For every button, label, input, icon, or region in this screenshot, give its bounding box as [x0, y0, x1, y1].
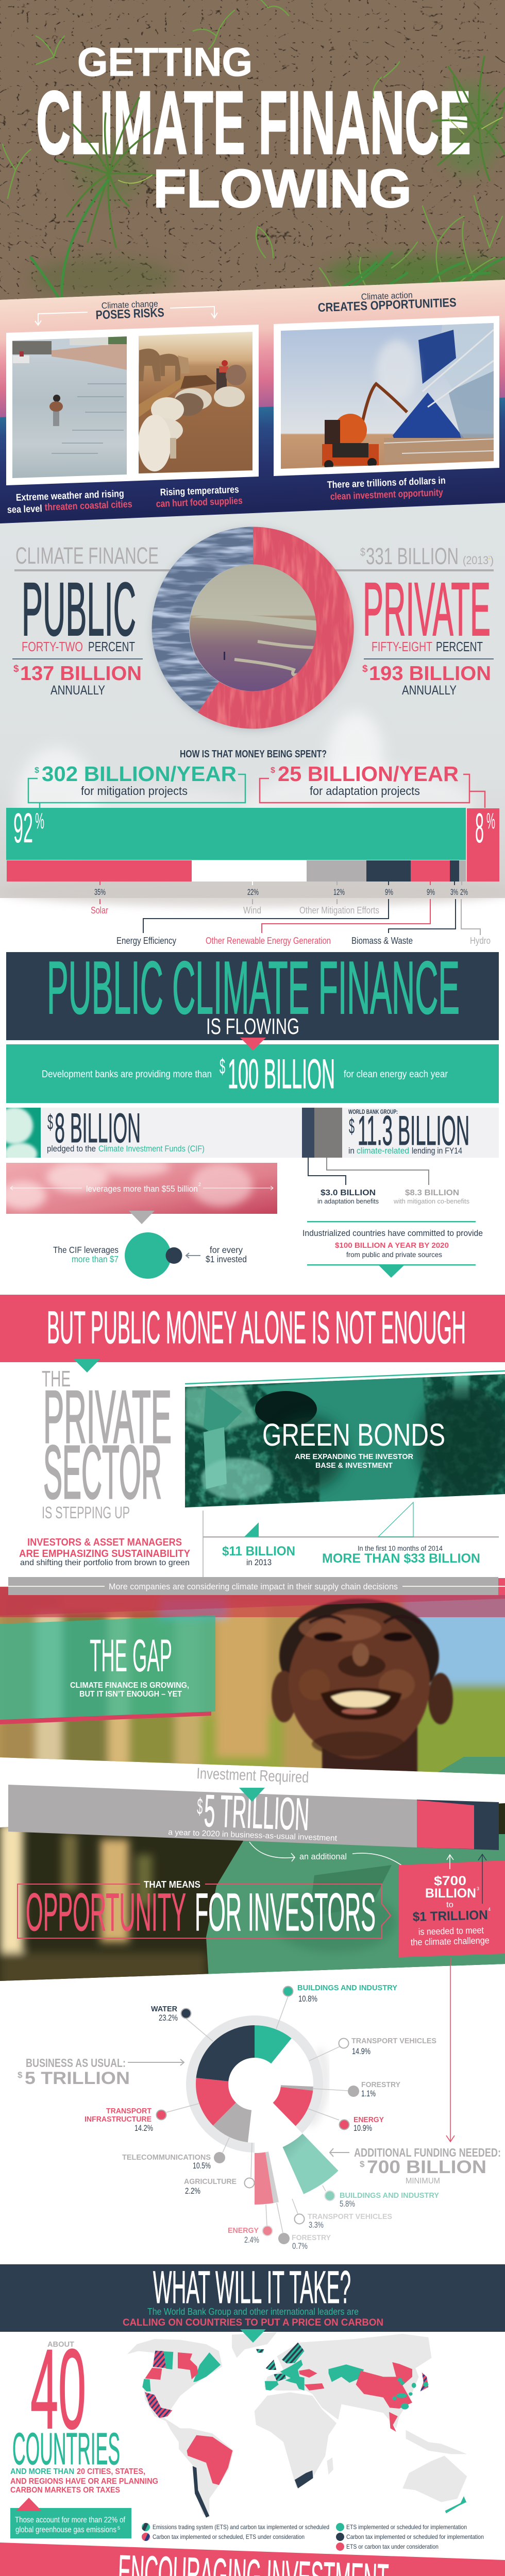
donut: public vs private share — [152, 527, 354, 731]
lending breakdown: with mitigation co-benefits — [393, 1198, 469, 1205]
private panel: ANNUALLY — [402, 683, 457, 698]
lending breakdown — [308, 1158, 469, 1205]
additional text with curved arrows: an additional — [299, 1852, 347, 1861]
photo: lower part with green shirt — [0, 1798, 505, 1989]
cif leverage graphic: $1 invested — [206, 1254, 247, 1264]
caption: trillions of dollars: There are trillions of dollars in — [327, 476, 446, 490]
public panel: ANNUALLY — [50, 683, 105, 698]
label: additional energy: 2.4% — [244, 2235, 259, 2245]
panel: 700 billion to 1 trillion: is needed to meet — [418, 1925, 484, 1937]
label: forestry: FORESTRY — [361, 2081, 400, 2089]
pink band heading — [0, 1295, 505, 1362]
panel: the gap: CLIMATE FINANCE IS GROWING, — [70, 1681, 189, 1690]
adaptation callout: $ — [271, 766, 275, 775]
label: additional buildings and industry: BUILDINGS AND INDUSTRY — [340, 2192, 439, 2200]
label: additional buildings and industry: 5.8% — [340, 2199, 355, 2209]
panel: the gap: BUT IT ISN’T ENOUGH – YET — [79, 1690, 182, 1699]
investors text: ARE EMPHASIZING SUSTAINABILITY — [19, 1548, 191, 1560]
leader lines — [100, 882, 480, 935]
label: transport infrastructure: TRANSPORT — [106, 2107, 152, 2115]
panel: 700 billion to 1 trillion — [399, 1854, 505, 1957]
panel: 8 billion pledged: $ — [47, 1110, 53, 1134]
cif leverage graphic: more than $7 — [72, 1254, 119, 1264]
text: PUBLIC — [22, 567, 136, 652]
arrow triangle grey — [129, 1211, 155, 1224]
arrow: to left photo — [35, 312, 88, 325]
label: additional funding needed — [330, 2146, 501, 2185]
label: energy: ENERGY — [354, 2116, 384, 2124]
label: additional transport vehicles: TRANSPORT VEHICLES — [308, 2213, 392, 2221]
five trillion text: a year to 2020 in business-as-usual investment — [168, 1828, 338, 1843]
panel: 700 billion to 1 trillion: BILLION — [425, 1886, 476, 1901]
panel: world bank group lending: climate-related — [357, 1146, 409, 1156]
about 40 countries stat: CARBON MARKETS OR TAXES — [10, 2486, 120, 2495]
panel: 700 billion to 1 trillion: 4 — [488, 1907, 491, 1912]
heading: climate finance total: $ — [360, 546, 365, 558]
map legend: Carbon tax implemented or scheduled for implementation — [346, 2533, 484, 2540]
photo: cattle and camels — [138, 332, 252, 474]
label: business as usual — [18, 2056, 184, 2088]
panel: development banks: $ — [220, 1054, 225, 1078]
title — [36, 39, 471, 219]
private panel: PERCENT — [436, 639, 483, 654]
panel: world bank group lending: lending in FY14 — [412, 1146, 462, 1156]
investment bars — [8, 1785, 499, 1850]
arrow triangle teal over bar — [239, 1788, 265, 1802]
panel: the gap: THE GAP — [90, 1630, 172, 1681]
panel: world bank group lending: WORLD BANK GROUP: — [348, 1109, 398, 1115]
cif leverage graphic: The CIF leverages — [53, 1245, 119, 1255]
green bonds photo panel: BASE & INVESTMENT — [315, 1461, 393, 1470]
about 40 countries stat: COUNTRIES — [12, 2424, 120, 2474]
label: additional forestry: FORESTRY — [292, 2234, 331, 2242]
text: SECTOR — [43, 1430, 162, 1515]
industrialized countries commitment: from public and private sources — [346, 1250, 442, 1259]
adaptation callout — [260, 762, 485, 808]
right photo frame — [274, 316, 499, 476]
text: PRIVATE — [43, 1375, 172, 1459]
caption: trillions of dollars — [327, 476, 446, 502]
about 40 countries stat: 20 CITIES, STATES, — [77, 2467, 145, 2476]
private panel: 193 BILLION — [369, 663, 491, 685]
bar chart: spending split: 8 — [475, 805, 484, 852]
heading: the private sector — [42, 1366, 172, 1522]
panel: world bank group lending: in — [348, 1146, 355, 1156]
caption: rising temperatures: can hurt food supplies — [156, 496, 243, 510]
green bonds chart: $11 BILLION — [222, 1544, 295, 1558]
arrow triangle teal — [74, 1359, 100, 1372]
label: transport infrastructure: INFRASTRUCTURE — [85, 2115, 152, 2124]
label: telecommunications: 10.5% — [193, 2161, 211, 2171]
industrialized countries commitment: Industrialized countries have committed to provide — [302, 1228, 483, 1238]
mitigation callout: $ — [35, 766, 39, 775]
bar chart: spending split: % — [35, 808, 44, 834]
ets and tax hatched regions — [256, 2343, 305, 2382]
cif leverage graphic — [53, 1232, 247, 1279]
private panel: FIFTY-EIGHT — [372, 639, 432, 654]
label: telecommunications — [122, 2152, 225, 2171]
green bonds chart: in 2013 — [246, 1557, 272, 1567]
caption: extreme weather: Extreme weather and rising — [15, 488, 124, 503]
category labels: Other Renewable Energy Generation — [206, 936, 331, 946]
adaptation callout: 25 BILLION/YEAR — [278, 762, 459, 786]
panel: leverages 55 billion — [6, 1163, 277, 1214]
donut leader lines — [166, 1996, 348, 2233]
panel: opportunity for investors: OPPORTUNITY — [26, 1883, 186, 1942]
label: business as usual: $ — [18, 2070, 23, 2080]
panel: 700 billion to 1 trillion: to — [446, 1901, 453, 1909]
percentage values: 35% — [94, 887, 106, 897]
about 40 countries stat: AND MORE THAN — [10, 2467, 74, 2476]
panel: 8 billion pledged: Climate Investment Funds (CIF) — [98, 1144, 205, 1154]
mitigation callout: 302 BILLION/YEAR — [42, 762, 237, 786]
percentage values: 9% — [427, 887, 435, 897]
heading: climate finance total: 331 BILLION — [366, 543, 459, 569]
map legend: ETS or carbon tax under consideration — [346, 2543, 439, 2550]
public panel — [12, 567, 143, 698]
left photo frame — [6, 325, 259, 485]
green bonds photo panel: ARE EXPANDING THE INVESTOR — [295, 1452, 413, 1461]
public panel: FORTY-TWO — [22, 639, 83, 654]
about 40 countries stat: ABOUT — [47, 2341, 74, 2349]
panel: development banks: Development banks are providing more than — [42, 1069, 212, 1080]
five trillion text: $ — [197, 1794, 203, 1819]
label: energy — [339, 2116, 384, 2133]
percentage values: 22% — [247, 887, 259, 897]
panel: 700 billion to 1 trillion: the climate challenge — [411, 1935, 490, 1947]
dark band: what will it take — [0, 2261, 505, 2332]
mitigation callout — [28, 762, 245, 808]
panel: 8 billion pledged: pledged to the — [47, 1144, 96, 1154]
dark band: what will it take: The World Bank Group and other international leaders are — [147, 2307, 359, 2317]
callout: share of emissions: global greenhouse gas emissions — [15, 2526, 116, 2534]
investors text: INVESTORS & ASSET MANAGERS — [27, 1537, 182, 1548]
adaptation callout: for adaptation projects — [310, 784, 420, 798]
under consideration regions — [145, 2352, 412, 2485]
percentage values: 9% — [385, 887, 393, 897]
lending breakdown: $8.3 BILLION — [405, 1189, 459, 1197]
panel: world bank group lending — [302, 1108, 499, 1158]
photo: hazy beach in ring — [190, 564, 319, 691]
label: business as usual: 5 TRILLION — [25, 2069, 130, 2088]
panel: 700 billion to 1 trillion: 3 — [477, 1886, 479, 1891]
panel: the gap — [0, 1615, 215, 1724]
donut chart: investment by sector — [186, 2015, 339, 2205]
header photo: cracked earth — [0, 0, 505, 304]
label: forestry — [348, 2081, 400, 2098]
heading: climate change poses risks — [95, 299, 164, 323]
private panel — [362, 567, 494, 698]
about 40 countries stat — [10, 2326, 158, 2495]
public panel: $ — [13, 664, 19, 674]
category labels: Wind — [243, 905, 261, 916]
heading: climate change poses risks: Climate change — [101, 299, 158, 311]
panel: development banks: for clean energy each year — [344, 1069, 448, 1080]
panel: 700 billion to 1 trillion: $1 TRILLION — [412, 1908, 488, 1924]
caption: trillions of dollars: clean investment opportunity — [330, 487, 443, 502]
arrow: to right photo — [170, 307, 217, 318]
label: additional funding needed: $ — [360, 2159, 365, 2169]
label: agriculture: 2.2% — [185, 2186, 200, 2196]
gradient band: risks and opportunities — [0, 280, 505, 523]
green bonds chart: In the first 10 months of 2014 — [358, 1544, 443, 1552]
panel: development banks — [6, 1044, 499, 1103]
about 40 countries stat: 40 — [30, 2326, 86, 2452]
panel: opportunity for investors: THAT MEANS — [144, 1879, 200, 1890]
percentage values: 2% — [460, 887, 468, 897]
label: additional transport vehicles — [295, 2213, 392, 2230]
label: energy: 10.9% — [354, 2123, 372, 2133]
dark band: what will it take: CALLING ON COUNTRIES TO PUT A PRICE ON CARBON — [123, 2317, 383, 2328]
panel: public climate finance heading: IS FLOWING — [206, 1014, 299, 1039]
investors text — [19, 1537, 191, 1567]
map legend: Emissions trading system (ETS) and carbon tax implemented or scheduled — [153, 2523, 329, 2531]
public panel: 137 BILLION — [20, 663, 142, 685]
heading: climate finance total: CLIMATE FINANCE — [15, 543, 159, 569]
category labels: Other Mitigation Efforts — [299, 905, 379, 916]
label: agriculture: AGRICULTURE — [184, 2178, 237, 2186]
label: additional transport vehicles: 3.3% — [309, 2220, 324, 2230]
percentage values: 12% — [333, 887, 345, 897]
bar chart: spending split — [6, 805, 499, 882]
public panel: PERCENT — [88, 639, 135, 654]
category labels: Biomass & Waste — [351, 936, 413, 946]
cif leverage graphic: for every — [210, 1245, 243, 1255]
panel: development banks: 100 BILLION — [228, 1051, 335, 1097]
grey strip: supply chain: More companies are considering climate impact in their supply chain decisions — [109, 1582, 398, 1591]
arrow triangle into map — [240, 2329, 266, 2343]
green bonds photo panel — [185, 1370, 505, 1510]
industrialized countries commitment: $100 BILLION A YEAR BY 2020 — [335, 1241, 449, 1250]
world map of carbon pricing — [127, 2332, 467, 2518]
panel: leverages 55 billion: 2 — [198, 1182, 201, 1187]
five trillion text — [168, 1785, 338, 1843]
label: additional forestry — [278, 2233, 331, 2251]
label: agriculture — [184, 2178, 255, 2196]
heading: climate finance total: 1 — [488, 555, 491, 560]
heading: climate action creates opportunities: Climate action — [361, 290, 413, 302]
grey strip: supply chain — [0, 1577, 505, 1595]
label: telecommunications: TELECOMMUNICATIONS — [122, 2154, 211, 2162]
hatched regions of the map — [145, 2351, 428, 2418]
caption: extreme weather: sea level — [7, 503, 42, 516]
ets cities in china and japan — [392, 2378, 428, 2410]
lending breakdown: in adaptation benefits — [317, 1198, 379, 1205]
five trillion text: 5 TRILLION — [203, 1785, 310, 1840]
panel: world bank group lending: $ — [349, 1114, 355, 1138]
panel: leverages 55 billion: leverages more than $55 billion — [86, 1184, 198, 1194]
heading: climate finance total — [14, 543, 494, 571]
heading: climate change poses risks: POSES RISKS — [95, 306, 164, 323]
label: transport infrastructure — [85, 2107, 166, 2133]
caption: rising temperatures — [156, 484, 243, 510]
question heading: HOW IS THAT MONEY BEING SPENT? — [180, 749, 327, 760]
carbon tax regions — [193, 2466, 313, 2518]
category labels — [91, 905, 491, 946]
map legend: ETS implemented or scheduled for implementation — [346, 2523, 467, 2531]
title: GETTING — [77, 39, 252, 84]
arrow: down to additional funding — [446, 1957, 454, 2142]
callout: share of emissions: Those account for more than 22% of — [15, 2516, 126, 2524]
heading: the private sector: IS STEPPING UP — [42, 1503, 130, 1522]
label: additional energy: ENERGY — [228, 2227, 259, 2235]
heading: climate action creates opportunities: CREATES OPPORTUNITIES — [317, 296, 457, 315]
ets implemented regions — [142, 2351, 466, 2513]
photo: flooded street — [12, 335, 127, 482]
map legend — [142, 2523, 484, 2551]
panel: 8 billion pledged: 8 BILLION — [55, 1105, 141, 1151]
label: transport vehicles: TRANSPORT VEHICLES — [351, 2037, 436, 2045]
label: water: 23.2% — [159, 2013, 178, 2023]
label: transport vehicles: 14.9% — [352, 2046, 371, 2056]
label: business as usual: BUSINESS AS USUAL: — [26, 2056, 126, 2070]
label: forestry: 1.1% — [361, 2089, 376, 2098]
percentage values — [94, 887, 468, 897]
grass in the header photo — [3, 0, 505, 299]
additional text with curved arrows — [249, 1842, 417, 1879]
panel: 8 billion pledged — [6, 1108, 302, 1158]
industrialized countries commitment — [302, 1221, 483, 1278]
about 40 countries stat: AND REGIONS HAVE OR ARE PLANNING — [10, 2477, 158, 2486]
heading: climate finance total: ) — [490, 554, 494, 567]
label: buildings and industry — [283, 1984, 397, 2004]
heading: climate finance total: (2013 — [463, 554, 489, 567]
label: additional funding needed: MINIMUM — [406, 2177, 440, 2185]
callout: share of emissions — [10, 2498, 131, 2538]
label: water: WATER — [151, 2005, 178, 2013]
private panel: $ — [362, 664, 368, 674]
section 3 backdrop with clouds — [0, 495, 505, 907]
label: water — [151, 2005, 191, 2023]
title: FLOWING — [153, 159, 412, 219]
caption: rising temperatures: Rising temperatures — [160, 484, 239, 498]
green bonds chart: MORE THAN $33 BILLION — [322, 1551, 480, 1566]
category labels: Solar — [91, 905, 108, 916]
label: transport vehicles — [339, 2037, 436, 2056]
percentage values: 3% — [450, 887, 458, 897]
callout: share of emissions: 5 — [117, 2526, 120, 2531]
label: additional energy — [228, 2226, 272, 2245]
investors text: and shifting their portfolio from brown to green — [20, 1558, 190, 1567]
label: additional forestry: 0.7% — [292, 2241, 308, 2251]
label: buildings and industry: 10.8% — [298, 1994, 317, 2004]
heading: the private sector: THE — [42, 1366, 71, 1392]
bar chart: spending split: 92 — [13, 805, 33, 852]
panel: 700 billion to 1 trillion: $700 — [434, 1874, 466, 1888]
green bonds chart — [203, 1502, 499, 1577]
heading: investment required: Investment Required — [196, 1765, 309, 1786]
caption: extreme weather — [7, 488, 132, 516]
category labels: Energy Efficiency — [116, 936, 176, 946]
mitigation callout: for mitigation projects — [81, 784, 188, 798]
photo: smiling boy — [0, 1586, 505, 1783]
photo: solar plant maintenance — [281, 323, 494, 470]
label: additional buildings and industry — [325, 2191, 439, 2209]
label: transport infrastructure: 14.2% — [134, 2123, 153, 2133]
green bonds photo panel: GREEN BONDS — [262, 1417, 445, 1452]
arrow triangle — [240, 1038, 266, 1050]
map legend: Carbon tax implemented or scheduled, ETS under consideration — [153, 2533, 305, 2540]
lending breakdown: $3.0 BILLION — [321, 1189, 376, 1197]
category labels: Hydro — [470, 936, 491, 946]
label: buildings and industry: BUILDINGS AND INDUSTRY — [297, 1984, 397, 1992]
label: additional funding needed: 700 BILLION — [367, 2157, 486, 2177]
caption: extreme weather: threaten coastal cities — [44, 499, 132, 513]
